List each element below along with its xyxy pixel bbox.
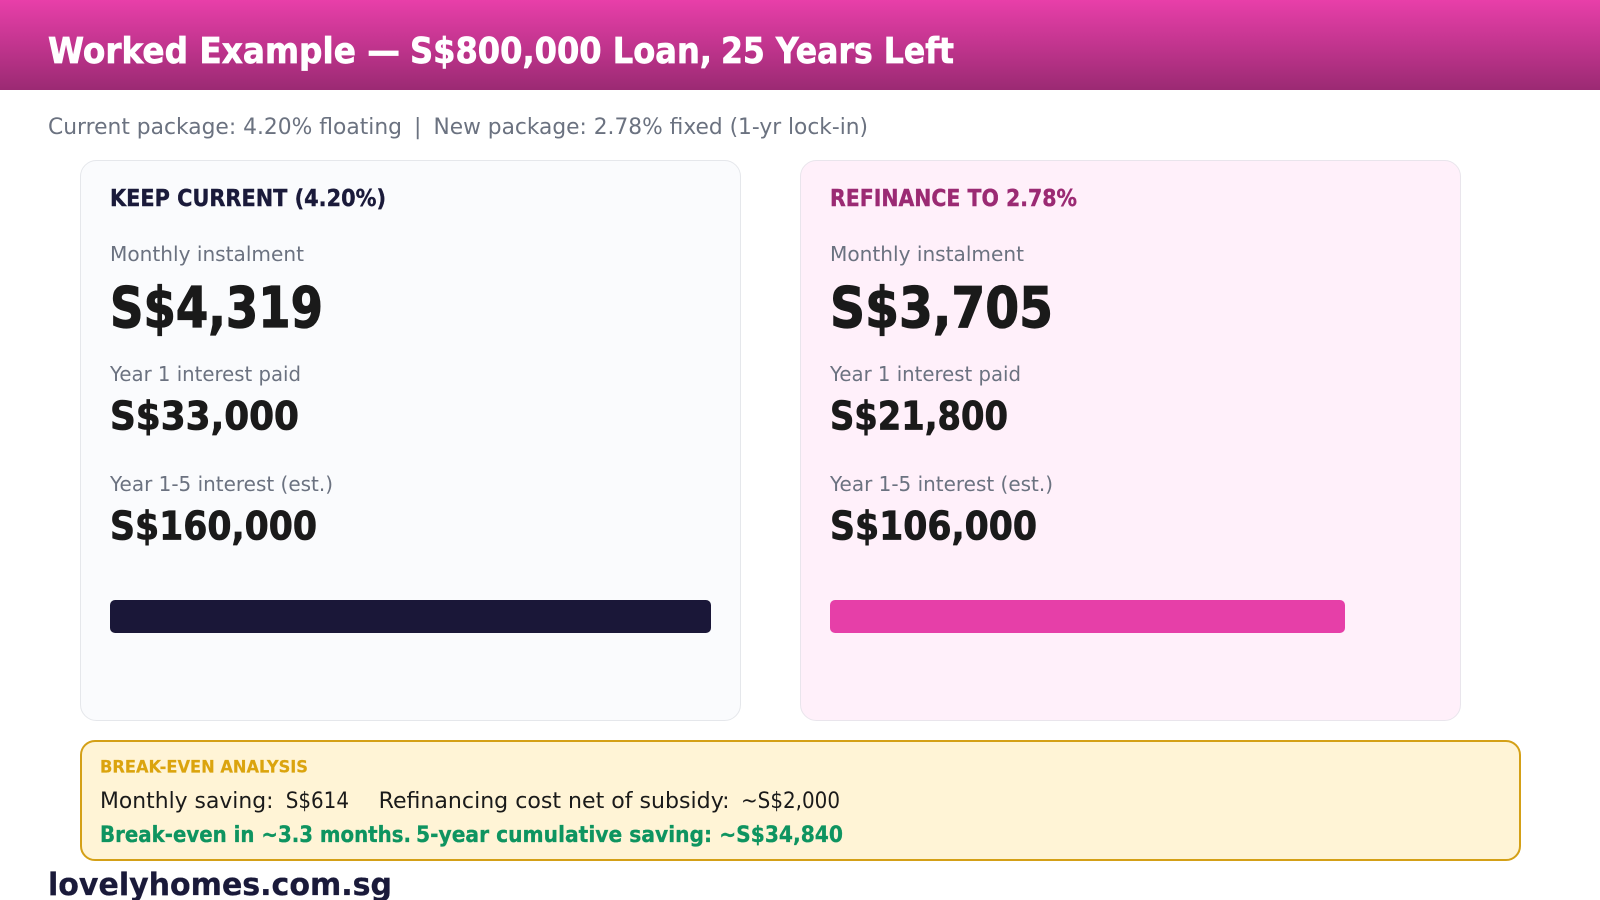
monthly saving: Monthly saving: [100,789,274,814]
year 1 interest label: Year 1 interest paid [109,362,301,386]
break-even result: 5-year cumulative saving: ~S$34,840 [416,822,843,848]
title [48,31,954,72]
break-even result: Break-even in ~3.3 months. [100,822,411,848]
refinancing cost: Refinancing cost net of subsidy: [379,789,730,814]
title: Worked Example — [48,31,400,72]
year 1-5 interest label: Year 1-5 interest (est.) [109,472,333,496]
panel heading: KEEP CURRENT (4.20%) [110,184,386,212]
year 1-5 interest value: S$160,000 [110,504,317,550]
callout heading: BREAK-EVEN ANALYSIS [100,758,308,778]
monthly instalment label: Monthly instalment [110,242,304,266]
title: S$800,000 Loan, [410,31,712,72]
refinancing cost: ~S$2,000 [741,789,840,814]
subtitle: Current package: 4.20% floating [48,115,402,140]
break-even result [100,822,843,848]
monthly instalment value: S$4,319 [110,276,323,341]
year 1 interest label: Year 1 interest paid [829,362,1021,386]
comparison bar: refinance [830,600,1345,633]
year 1 interest value: S$21,800 [830,394,1008,440]
year 1 interest value: S$33,000 [110,394,299,440]
callout: break-even analysis [81,741,1520,860]
monthly instalment label: Monthly instalment [830,242,1024,266]
title: 25 Years Left [721,31,954,72]
year 1-5 interest label: Year 1-5 interest (est.) [829,472,1053,496]
subtitle [48,115,868,140]
monthly saving: S$614 [286,789,349,814]
panel: keep current [80,160,740,720]
comparison bar: current [110,600,711,633]
header banner [0,0,1600,90]
subtitle: | [414,115,421,140]
panel heading: REFINANCE TO 2.78% [830,184,1077,212]
subtitle: New package: 2.78% fixed (1-yr lock-in) [434,115,868,140]
monthly instalment value: S$3,705 [830,276,1053,341]
panel: refinance [800,160,1460,720]
year 1-5 interest value: S$106,000 [830,504,1037,550]
